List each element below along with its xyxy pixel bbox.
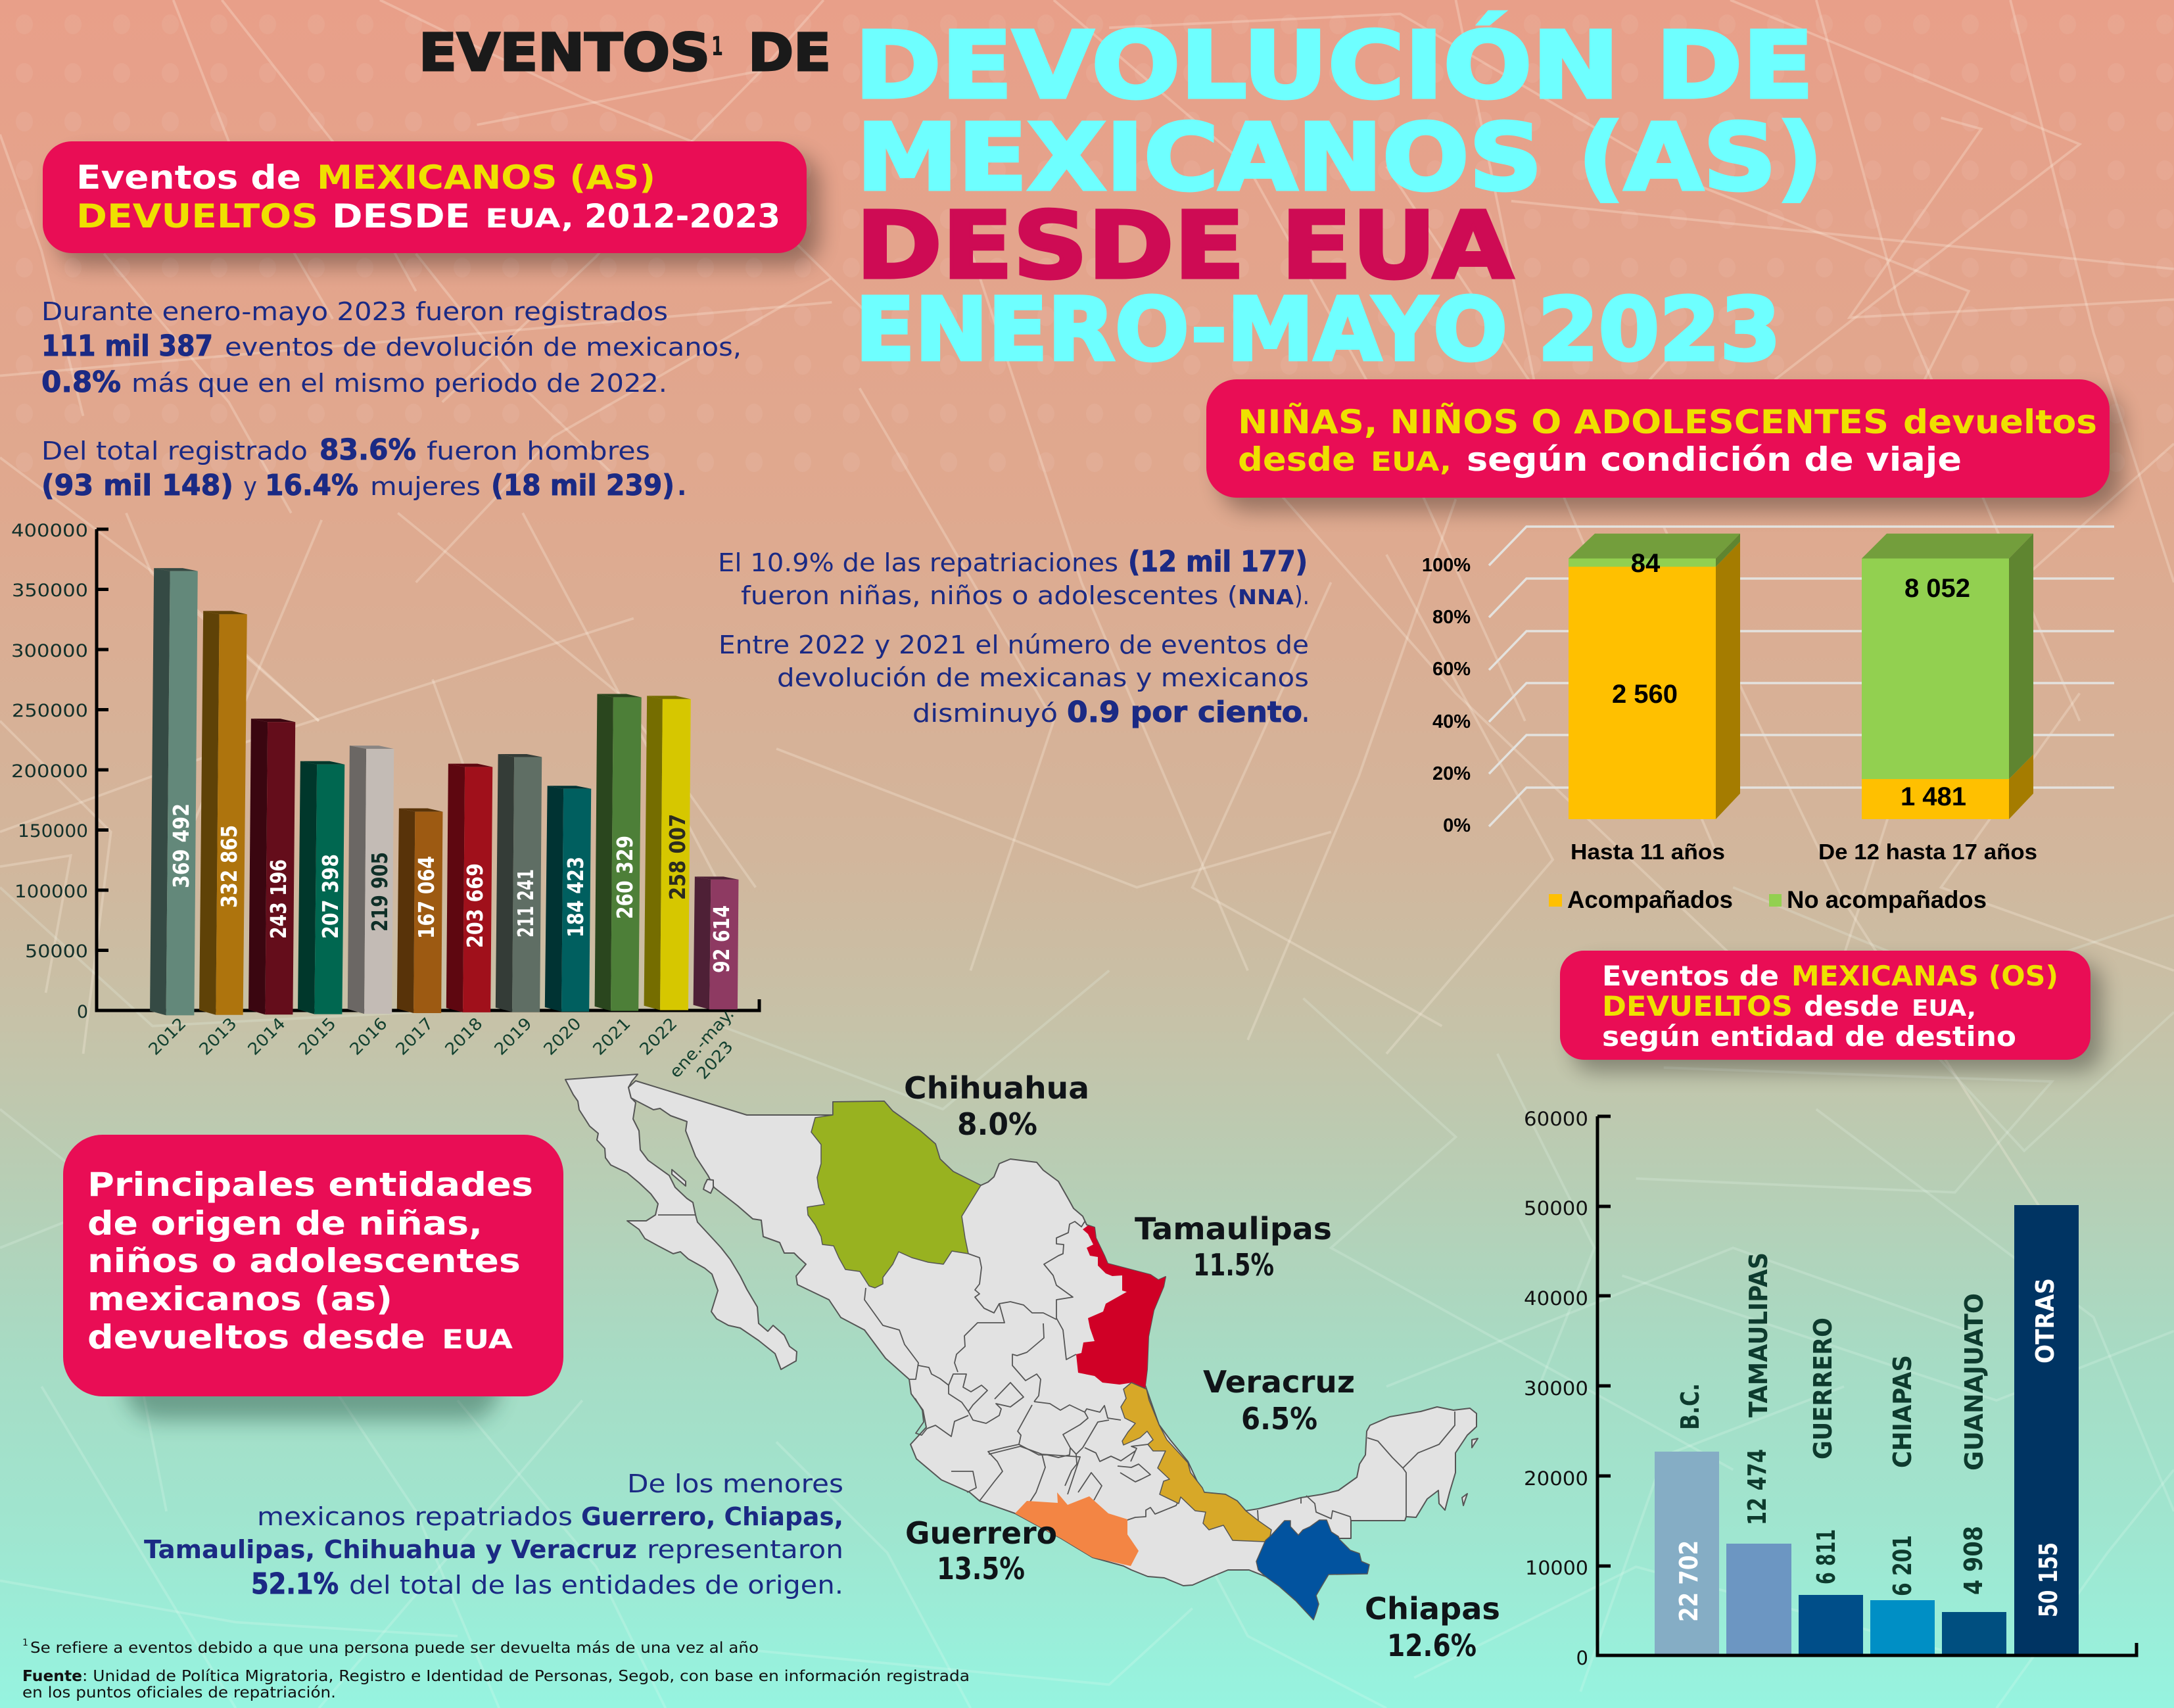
label: Chihuahua: Chihuahua [904,1070,1089,1106]
label: Chihuahua: 8.0% [957,1106,1037,1142]
percentage axis labels: 100% [1422,555,1471,576]
panel: eventos de mexicanos devueltos heading: 2012-2023 [584,197,780,235]
axis labels: 20000 [1524,1467,1588,1490]
text block: menores repatriados [144,1469,843,1601]
label: Guerrero [905,1515,1057,1586]
panel: eventos de mexicanos devueltos heading: Eventos de [76,158,301,197]
text block: hombres y mujeres: Del total registrado [41,437,308,465]
label: Chiapas: Chiapas [1365,1591,1500,1626]
chart gridlines [1489,527,2114,826]
bar values: 260 329 [612,836,638,919]
state: Tamaulipas [1076,1225,1166,1388]
text block: menores repatriados: representaron [647,1535,843,1564]
title: devolución de mexicanos desde EUA enero-mayo 2023: ENERO-MAYO 2023 [855,279,1781,381]
state borders [658,1215,1455,1521]
axis labels: 300000 [11,641,88,661]
bar values: 211 241 [513,869,538,937]
text block: total de eventos: 111 mil 387 [41,329,213,363]
3D bars [150,568,738,1015]
label: Veracruz: 6.5% [1241,1401,1317,1436]
chart axes [1597,1116,2137,1655]
panel: NNA devueltos heading: desde [1238,440,1356,479]
text block: hombres y mujeres: 83.6% [319,433,416,467]
axis labels: 10000 [1525,1557,1588,1579]
category labels: De 12 hasta 17 años [1818,840,2037,864]
text block: total de eventos [41,297,742,399]
bar values: 369 492 [168,803,194,888]
text block: menores repatriados: De los menores [627,1469,843,1498]
panel: NNA devueltos heading: NIÑAS, NIÑOS O ADOLESCENTES [1238,402,1889,441]
label: Veracruz: Veracruz [1203,1364,1355,1400]
panel: eventos de mexicanos devueltos heading [43,141,820,266]
bar values [168,803,734,973]
year labels: 2020 [540,1014,585,1059]
bar chart: eventos 2012-2023 [11,521,759,1083]
footnote and source: : Unidad de Política Migratoria, Registro e Identidad de Personas, Segob, con base en información registrada [82,1668,970,1685]
panel: eventos por entidad de destino heading: DEVUELTOS [1602,990,1793,1022]
text block: menores repatriados: mexicanos repatriados [257,1502,573,1531]
text block: total de eventos: más que en el mismo periodo de 2022. [131,369,667,398]
title: eventos de: DE [748,24,831,83]
axis labels: 350000 [12,581,88,601]
text block: total de eventos: 0.8% [41,366,121,399]
label: Chihuahua [904,1070,1089,1142]
bar values: 207 398 [318,854,343,939]
axis labels: 250000 [12,701,88,721]
axis labels: 60000 [1524,1108,1588,1130]
text block: hombres y mujeres: (18 mil 239) [491,469,674,502]
axis labels: 50000 [25,941,88,962]
legend: Acompañados [1567,886,1733,913]
axis labels: 100000 [14,882,88,902]
percentage axis labels: 80% [1432,607,1471,628]
title: devolución de mexicanos desde EUA enero-mayo 2023: DEVOLUCIÓN DE [855,11,1814,120]
footnote and source: 1 [22,1638,28,1648]
year labels: 2013 [195,1014,241,1059]
rotated bar labels: CHIAPAS [1888,1355,1917,1468]
panel: eventos de mexicanos devueltos heading: EUA, [485,204,574,234]
title: eventos de: 1 [711,32,723,62]
axis labels: 0 [77,1002,88,1022]
rotated bar labels: B.C. [1676,1383,1705,1430]
title: devolución de mexicanos desde EUA enero-mayo 2023: DESDE EUA [856,193,1513,300]
percentage axis labels: 60% [1432,659,1471,680]
title: devolución de mexicanos desde EUA enero-mayo 2023: MEXICANOS (AS) [857,105,1823,212]
text block: total de eventos: Durante enero-mayo 2023 fueron registrados [41,297,668,326]
text block: repatriaciones de NNA: Entre 2022 y 2021 el número de eventos de [719,630,1309,659]
year labels: 2018 [441,1014,486,1059]
state: Chiapas [1256,1520,1369,1620]
year labels: 2014 [244,1014,289,1059]
rotated bar labels: GUANAJUATO [1960,1293,1989,1471]
axis labels: 150000 [18,821,88,842]
data labels: 8 052 [1904,574,1970,603]
panel: eventos por entidad de destino heading: desde [1804,990,1899,1022]
title: eventos de: EVENTOS [419,24,710,83]
axis labels: 50000 [1524,1197,1588,1220]
text block: repatriaciones de NNA: (12 mil 177) [1128,545,1308,579]
data labels: 2 560 [1612,680,1678,709]
label: Tamaulipas: Tamaulipas [1135,1211,1332,1246]
text block: hombres y mujeres: y [243,472,257,501]
label: Chiapas: 12.6% [1387,1628,1477,1663]
text block: menores repatriados: 52.1% [251,1567,339,1601]
panel: principales entidades de origen heading: niños o adolescentes [87,1242,521,1280]
text block: menores repatriados: Tamaulipas, Chihuahua y Veracruz [144,1535,637,1564]
text block: repatriaciones de NNA: El 10.9% de las repatriaciones [718,548,1118,577]
category labels [1571,840,2037,864]
islands [672,1170,1478,1506]
panel: NNA devueltos heading: EUA, [1371,447,1452,477]
label: Tamaulipas: 11.5% [1193,1247,1274,1283]
percentage axis labels: 40% [1432,711,1471,732]
axis labels: 30000 [1524,1377,1588,1400]
text block: menores repatriados: del total de las entidades de origen. [349,1571,843,1600]
chart axes [97,529,759,1010]
year labels: 2012 [145,1014,190,1059]
stacked bar chart: condición de viaje [1422,527,2114,913]
map of Mexico [565,1074,1478,1620]
text block: total de eventos: eventos de devolución de mexicanos, [225,333,742,362]
text block: repatriaciones de NNA: fueron niñas, niños o adolescentes ( [741,581,1238,610]
axis labels: 200000 [11,761,88,782]
year labels: 2016 [346,1014,391,1059]
year labels: 2023 [693,1037,737,1083]
text block: repatriaciones de NNA: NNA [1238,586,1294,609]
panel: eventos por entidad de destino heading: según entidad de destino [1602,1020,2016,1053]
state: Veracruz [1121,1383,1271,1542]
rotated bar labels: GUERRERO [1808,1317,1837,1459]
year labels [145,1005,738,1083]
text block: repatriaciones de NNA: 0.9 por ciento [1067,696,1302,729]
bar values: 167 064 [414,856,439,939]
percentage axis labels: 20% [1432,763,1471,784]
bar: de 12 hasta 17 años [1862,534,2033,819]
rotated bar labels: 50 155 [2034,1542,2063,1617]
year labels: 2022 [636,1014,681,1059]
bar chart: entidad de destino [1524,1108,2137,1669]
panel: NNA devueltos heading [1206,379,2123,511]
rotated bar labels: 4 908 [1959,1526,1988,1595]
text block: hombres y mujeres: mujeres [370,472,481,501]
panel: principales entidades de origen heading: mexicanos (as) [87,1280,392,1318]
panel: principales entidades de origen heading: EUA [442,1325,513,1355]
rotated bar labels: 12 474 [1743,1449,1772,1525]
Baja California peninsula [565,1074,797,1369]
panel: principales entidades de origen heading [63,1135,563,1420]
panel: eventos de mexicanos devueltos heading: DEVUELTOS [76,197,318,235]
background geometric lines [0,0,2174,1248]
lower background lines [0,888,2174,1708]
map labels [904,1070,1500,1663]
label: Tamaulipas [1135,1211,1332,1283]
bar values: 203 669 [462,863,488,948]
panel: eventos por entidad de destino heading: MEXICANAS (OS) [1791,960,2058,992]
rotated bar labels: 22 702 [1674,1540,1703,1622]
title: eventos de [419,24,831,83]
footnote and source [22,1638,970,1701]
percentage axis labels: 0% [1443,815,1471,836]
year labels: ene.-may. [665,1005,738,1081]
percentage axis labels [1422,555,1471,836]
data labels [1612,549,1970,811]
panel: principales entidades de origen heading: de origen de niñas, [87,1204,483,1243]
footnote and source: en los puntos oficiales de repatriación. [22,1684,336,1701]
panel: eventos por entidad de destino heading: EUA, [1912,995,1976,1022]
footnote and source: Se refiere a eventos debido a que una persona puede ser devuelta más de una vez al año [30,1640,759,1657]
axis labels: 40000 [1524,1287,1588,1310]
text block: hombres y mujeres [41,433,686,502]
label: Guerrero: 13.5% [937,1551,1025,1586]
bar values: 92 614 [709,905,734,973]
data labels: 84 [1631,549,1661,578]
text block: repatriaciones de NNA [718,545,1310,729]
rotated bar labels: TAMAULIPAS [1744,1252,1773,1417]
text block: repatriaciones de NNA: devolución de mexicanas y mexicanos [777,663,1309,692]
axis labels [1524,1108,1588,1669]
panel: eventos por entidad de destino heading [1560,951,2102,1072]
data labels: 1 481 [1901,782,1966,811]
text block: repatriaciones de NNA: ). [1294,581,1310,610]
category labels: Hasta 11 años [1571,840,1725,864]
rotated bar labels: 6 201 [1888,1535,1917,1596]
legend: No acompañados [1787,886,1987,913]
panel: NNA devueltos heading: devueltos [1903,403,2097,441]
axis labels: 400000 [11,521,88,541]
bar values: 184 423 [563,857,588,937]
rotated bar labels [1674,1252,2063,1622]
text block: hombres y mujeres: (93 mil 148) [41,469,233,502]
axis labels [11,521,88,1022]
bar: hasta 11 años [1569,534,1740,819]
bar values: 219 905 [367,852,392,932]
text block: hombres y mujeres: . [677,472,686,501]
text block: hombres y mujeres: 16.4% [265,469,358,502]
panel: eventos por entidad de destino heading: Eventos de [1602,960,1779,992]
year labels: 2021 [589,1014,634,1059]
panel: principales entidades de origen heading: Principales entidades [87,1166,533,1204]
title: devolución de mexicanos desde EUA enero-mayo 2023 [855,11,1823,381]
legend [1549,886,1987,913]
state: Chihuahua [807,1101,981,1288]
text block: repatriaciones de NNA: . [1302,699,1309,728]
year labels: 2015 [295,1014,340,1059]
panel: eventos de mexicanos devueltos heading: MEXICANOS (AS) [317,158,655,197]
year labels: 2019 [490,1014,536,1059]
state: Guerrero [1015,1492,1139,1566]
panel: principales entidades de origen heading: devueltos desde [87,1318,425,1356]
rotated bar labels: 6 811 [1812,1529,1841,1584]
text block: hombres y mujeres: fueron hombres [427,437,650,465]
label: Veracruz [1203,1364,1355,1436]
label: Chiapas [1365,1591,1500,1663]
footnote and source: Fuente [22,1668,82,1685]
text block: menores repatriados: Guerrero, Chiapas, [581,1502,843,1531]
panel: eventos de mexicanos devueltos heading: DESDE [332,197,470,235]
bar values: 332 865 [216,825,242,908]
bars [1655,1205,2079,1656]
axis labels: 0 [1576,1647,1588,1669]
rotated bar labels: OTRAS [2031,1278,2060,1364]
mainland Mexico [628,1081,1477,1586]
text block: repatriaciones de NNA: disminuyó [912,699,1058,728]
label: Guerrero: Guerrero [905,1515,1057,1551]
bar values: 243 196 [266,859,291,939]
panel: NNA devueltos heading: según condición de viaje [1467,440,1962,479]
background dot pattern [0,0,2174,486]
year labels: 2017 [392,1014,437,1059]
bar values: 258 007 [665,814,690,900]
